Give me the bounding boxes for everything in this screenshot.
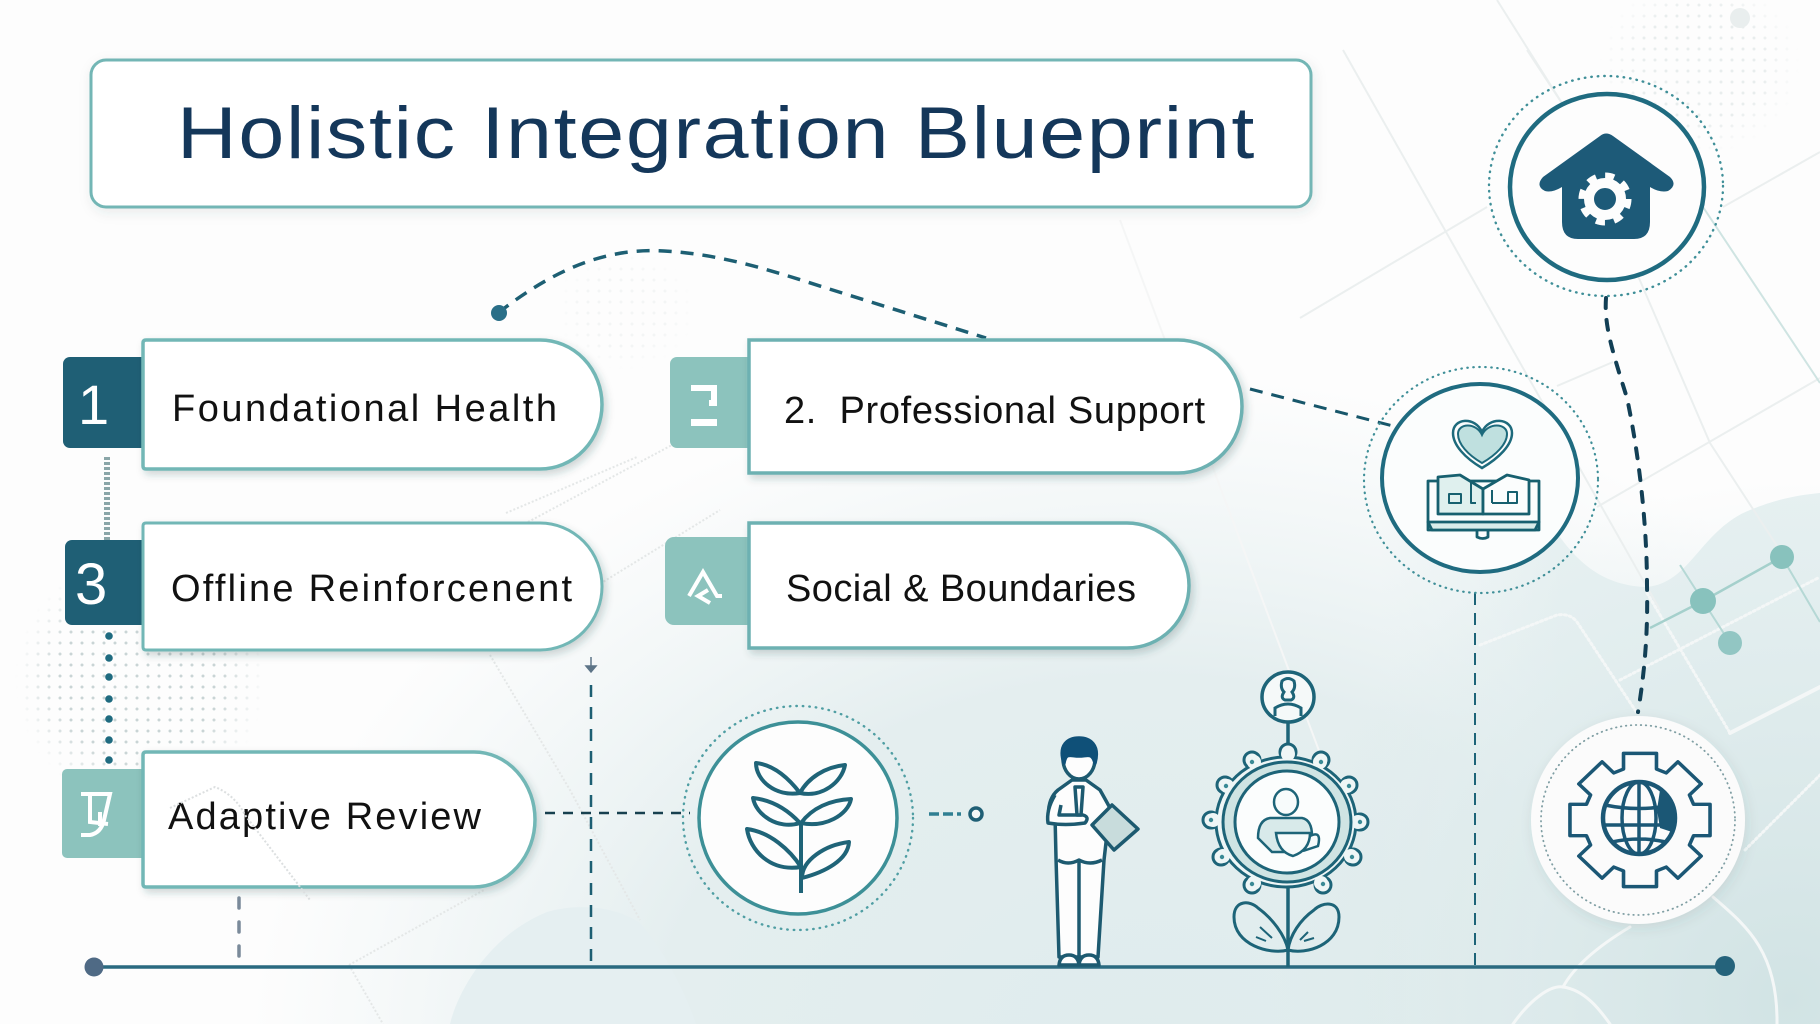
short dashed connector bbox=[237, 898, 241, 958]
dashed connector: professional support to book bbox=[1250, 389, 1397, 427]
icon: standing person with tablet bbox=[1048, 738, 1138, 965]
dashed connector: house to globe bbox=[1606, 298, 1647, 712]
leaves bbox=[1234, 903, 1339, 951]
open book bbox=[1428, 475, 1539, 538]
badge 4 bbox=[665, 537, 760, 625]
dashed connector arc with start dot bbox=[491, 251, 986, 338]
connector: step 3 to adaptive review bbox=[105, 632, 113, 764]
icon: book with heart bbox=[1364, 367, 1598, 593]
panel: step 1 foundational health bbox=[63, 340, 602, 469]
panel: step 2 professional support bbox=[670, 340, 1242, 473]
badge 5 bbox=[62, 769, 152, 858]
icon: plant circle bbox=[683, 706, 913, 930]
panel: step 3 offline reinforcement bbox=[65, 523, 602, 650]
badge 2 bbox=[670, 357, 760, 448]
icon: flower with gear head bbox=[1203, 672, 1368, 967]
badge 1 bbox=[63, 357, 153, 448]
timeline bbox=[84, 956, 1735, 976]
network nodes decoration bbox=[1650, 545, 1820, 655]
panel: step 4 social and boundaries: Social & Boundaries bbox=[786, 568, 1136, 610]
heart bbox=[1453, 421, 1512, 468]
panel: step 1 foundational health: Foundational Health bbox=[172, 388, 557, 430]
panel: step 3 offline reinforcement: Offline Reinforcenent bbox=[171, 568, 572, 610]
icon: house with gear bbox=[1489, 76, 1723, 296]
panel: step 4 social and boundaries bbox=[665, 523, 1189, 648]
icon: gear with globe bbox=[1531, 716, 1745, 924]
badge 3 bbox=[65, 540, 153, 625]
connector: steps 1 to 3 bbox=[104, 457, 110, 540]
person with cup bbox=[1258, 789, 1319, 856]
badge 1: 1 bbox=[78, 373, 109, 436]
panel: adaptive review: Adaptive Review bbox=[168, 796, 482, 838]
vertical dashed arrow bbox=[586, 657, 596, 967]
gear ring with bumps bbox=[1203, 744, 1368, 893]
title panel bbox=[91, 60, 1311, 207]
panel: adaptive review bbox=[62, 752, 535, 900]
person bubble bbox=[1262, 672, 1314, 722]
vertical dashed connector: book to timeline bbox=[1474, 593, 1476, 967]
title: Holistic Integration Blueprint bbox=[177, 93, 1256, 174]
dash with ring marker bbox=[929, 808, 982, 820]
dashed connector to plant bbox=[545, 812, 690, 814]
badge 3: 3 bbox=[75, 552, 107, 617]
panel: step 2 professional support: 2. Professional Support bbox=[784, 390, 1205, 432]
